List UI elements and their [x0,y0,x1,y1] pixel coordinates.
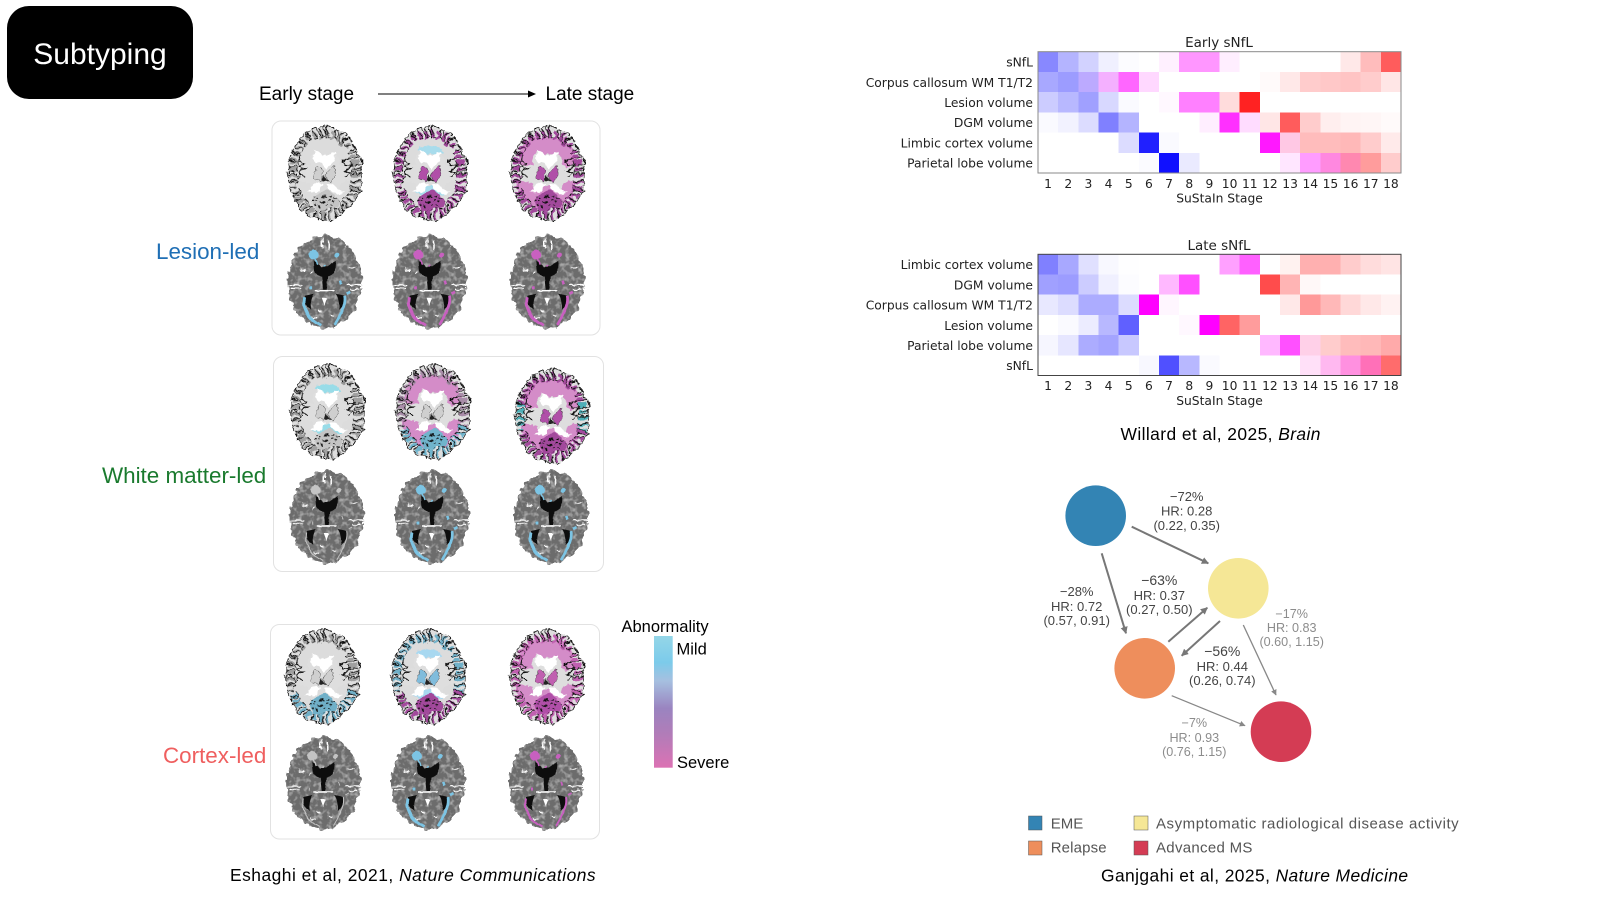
brain: cortex-led mid lesions [391,737,465,829]
diagram: disease state transitions [1043,485,1324,762]
stage axis: early to late [259,84,634,105]
heatmap: Early sNfL: 7 [1165,177,1173,191]
heatmap: Early sNfL: 3 [1084,177,1092,191]
legend: disease states: Relapse [1051,840,1107,857]
heatmap: Late sNfL: 4 [1105,379,1113,393]
heatmap: Early sNfL: Corpus callosum WM T1/T2 [866,76,1033,90]
annotation: EME to relapse [1043,584,1110,628]
annotation: asymptomatic to relapse: −56% [1204,643,1240,659]
arrow: EME to asymptomatic [1132,527,1208,563]
annotation: relapse to asymptomatic: HR: 0.37 [1134,588,1185,603]
panel: lesion-led [272,121,600,335]
heatmap: Early sNfL: 12 [1262,177,1278,191]
annotation: relapse to advanced MS: −7% [1182,716,1207,730]
annotation: EME to relapse: (0.57, 0.91) [1043,613,1110,628]
annotation: asymptomatic to relapse [1189,643,1256,688]
heatmap: Late sNfL: 17 [1363,379,1379,393]
title badge: Subtyping: Subtyping [33,38,167,71]
node: EME [1065,485,1126,546]
annotation: EME to relapse: HR: 0.72 [1051,599,1102,614]
heatmap: Early sNfL: 15 [1323,177,1338,191]
heatmap: Early sNfL: 16 [1343,177,1359,191]
heatmap: Late sNfL: 8 [1185,379,1193,393]
heatmap: Early sNfL: Early sNfL [1185,35,1253,51]
annotation: asymptomatic to advanced MS: HR: 0.83 [1267,621,1317,635]
annotation: relapse to advanced MS [1162,716,1227,759]
annotation: asymptomatic to advanced MS [1259,607,1324,649]
label: White matter-led: White matter-led [102,463,266,488]
arrow: EME to relapse [1102,553,1126,633]
heatmap: Early sNfL: 13 [1282,177,1298,191]
brain: white matter-led early lesions [290,471,364,563]
annotation: EME to asymptomatic [1153,489,1220,533]
annotation: relapse to asymptomatic: (0.27, 0.50) [1126,602,1193,617]
brain: lesion-led mid lesions [392,236,466,328]
heatmap: Late sNfL: Corpus callosum WM T1/T2 [866,298,1033,312]
annotation: relapse to advanced MS: (0.76, 1.15) [1162,745,1227,759]
heatmap: Late sNfL: 14 [1302,379,1318,393]
title badge: Subtyping [7,6,193,99]
panel: white matter-led [274,356,604,572]
heatmap: Early sNfL: DGM volume [954,116,1033,130]
heatmap: Late sNfL: Parietal lobe volume [907,339,1033,353]
heatmap: Early sNfL: Parietal lobe volume [907,156,1033,170]
heatmap: Early sNfL: Lesion volume [944,96,1033,110]
caption: Ganjgahi: Ganjgahi et al, 2025, Nature Medicine [1101,866,1409,886]
brain: cortex-led mid cortex [391,630,465,724]
heatmap: Late sNfL: 10 [1222,379,1237,393]
legend: disease states [1028,815,1459,857]
heatmap: Early sNfL: 6 [1145,177,1153,191]
brain: white matter-led late lesions [514,471,588,563]
heatmap: Late sNfL: 7 [1165,379,1173,393]
annotation: asymptomatic to advanced MS: −17% [1275,607,1308,621]
brain: cortex-led early cortex [285,630,359,724]
annotation: relapse to asymptomatic: −63% [1141,572,1177,588]
caption: Eshaghi: Eshaghi et al, 2021, Nature Communications [230,865,596,885]
stage axis: early to late: Early stage [259,84,354,105]
heatmap: Early sNfL: 17 [1363,177,1379,191]
heatmap: Early sNfL: SuStaIn Stage [1176,192,1263,206]
heatmap: Late sNfL: DGM volume [954,278,1033,292]
node: relapse [1114,638,1175,699]
heatmap: Late sNfL: 12 [1262,379,1278,393]
legend: abnormality colour bar: Severe [677,754,729,772]
heatmap: Early sNfL: 2 [1064,177,1072,191]
node: advanced MS [1251,701,1311,762]
brain: lesion-led mid cortex [393,126,467,220]
label: Lesion-led: Lesion-led [156,239,259,264]
brain: white matter-led mid cortex [396,365,470,459]
legend: disease states: Advanced MS [1156,840,1253,857]
arrow: relapse to advanced MS [1172,696,1245,726]
brain: lesion-led late lesions [510,236,584,328]
annotation: asymptomatic to advanced MS: (0.60, 1.15) [1259,635,1324,649]
brain: cortex-led late lesions [509,737,583,829]
heatmap: Early sNfL: 5 [1125,177,1133,191]
label: Cortex-led: Cortex-led [163,743,266,768]
heatmap: Late sNfL: 5 [1125,379,1133,393]
annotation: EME to asymptomatic: −72% [1170,489,1204,504]
annotation: EME to asymptomatic: (0.22, 0.35) [1153,518,1220,533]
annotation: asymptomatic to relapse: HR: 0.44 [1197,659,1248,674]
heatmap: Early sNfL: 4 [1105,177,1113,191]
heatmap: Early sNfL: 9 [1205,177,1213,191]
heatmap: Early sNfL: sNfL [1006,56,1033,70]
arrow: relapse to asymptomatic [1168,608,1207,642]
annotation: relapse to asymptomatic [1126,572,1193,617]
heatmap: Late sNfL: Limbic cortex volume [901,258,1033,272]
panel: cortex-led [270,624,600,839]
annotation: relapse to advanced MS: HR: 0.93 [1169,731,1219,745]
heatmap: Late sNfL: 2 [1064,379,1072,393]
caption: Willard: Willard et al, 2025, Brain [1120,424,1321,444]
brain: lesion-led early lesions [288,236,362,328]
heatmap: Late sNfL [866,238,1401,408]
node: asymptomatic radiological disease activity [1208,558,1269,619]
heatmap: Late sNfL: 6 [1145,379,1153,393]
heatmap: Early sNfL: Limbic cortex volume [901,136,1033,150]
heatmap: Early sNfL: 11 [1242,177,1258,191]
heatmap: Early sNfL [866,35,1401,206]
heatmap: Late sNfL: 3 [1084,379,1092,393]
heatmap: Late sNfL: Lesion volume [944,319,1033,333]
stage axis: early to late: Late stage [546,84,634,105]
heatmap: Early sNfL: 14 [1302,177,1318,191]
brain: cortex-led early lesions [286,737,360,829]
brain: white matter-led late cortex [515,369,589,463]
heatmap: Late sNfL: 16 [1343,379,1359,393]
arrow: asymptomatic to relapse [1182,621,1220,656]
legend: abnormality colour bar [622,618,729,772]
heatmap: Late sNfL: 18 [1383,379,1399,393]
arrow: asymptomatic to advanced MS [1243,625,1276,695]
heatmap: Late sNfL: 1 [1044,379,1052,393]
heatmap: Late sNfL: 9 [1205,379,1213,393]
heatmap: Early sNfL: 1 [1044,177,1052,191]
heatmap: Early sNfL: 10 [1222,177,1237,191]
annotation: asymptomatic to relapse: (0.26, 0.74) [1189,673,1256,688]
brain: white matter-led mid lesions [395,471,469,563]
annotation: EME to asymptomatic: HR: 0.28 [1161,504,1212,518]
heatmap: Early sNfL: 8 [1185,177,1193,191]
legend: abnormality colour bar: Mild [676,640,707,658]
brain: cortex-led late cortex [510,630,584,724]
annotation: EME to relapse: −28% [1060,584,1094,599]
brain: white matter-led early cortex [290,365,364,459]
heatmap: Late sNfL: 13 [1282,379,1298,393]
heatmap: Late sNfL: SuStaIn Stage [1176,394,1263,408]
heatmap: Late sNfL: Late sNfL [1187,238,1251,254]
heatmap: Late sNfL: sNfL [1006,359,1033,373]
brain: lesion-led early cortex [288,126,362,220]
brain: lesion-led late cortex [510,126,584,220]
legend: disease states: EME [1051,815,1083,832]
heatmap: Early sNfL: 18 [1383,177,1399,191]
heatmap: Late sNfL: 11 [1242,379,1258,393]
legend: abnormality colour bar: Abnormality [622,618,709,636]
heatmap: Late sNfL: 15 [1323,379,1338,393]
legend: disease states: Asymptomatic radiological disease activity [1156,815,1459,832]
